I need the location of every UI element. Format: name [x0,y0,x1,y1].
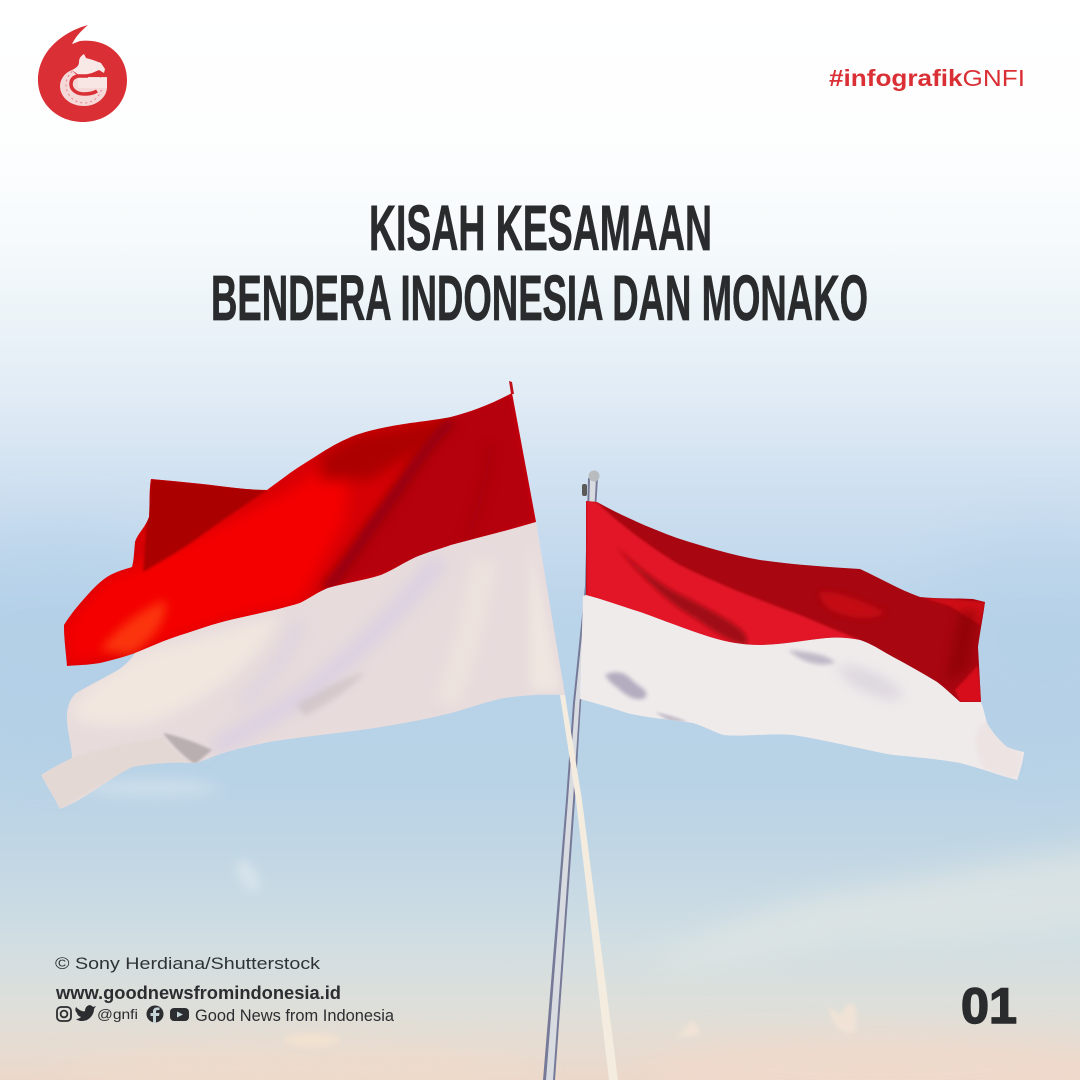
left flag white stripe [41,522,565,809]
website url: www.goodnewsfromindonesia.id [55,983,341,1003]
logo emblem bar [78,78,107,88]
logo red six shape [38,25,127,122]
left flag red stripe [64,393,536,666]
channel name: Good News from Indonesia [195,1006,395,1025]
logo: GNFI red six with eagle emblem [38,25,127,122]
right flag [580,501,1024,780]
icon: facebook [146,1006,164,1023]
left flag tip [509,381,514,394]
right flag white stripe [580,595,1024,780]
social row [57,1005,395,1025]
flag poles [543,470,618,1080]
hashtag heading: #infografik GNFI [829,65,1025,91]
icon: instagram [57,1007,71,1021]
right metal pole [543,478,598,1080]
logo eagle head [72,54,105,76]
logo emblem texture [66,67,102,103]
icon: youtube [170,1008,189,1021]
pole top finial [582,470,600,496]
small cloud right [828,1004,856,1033]
icon: twitter [75,1005,96,1021]
small cloud centre [675,1020,699,1037]
right flag red stripe [586,501,985,702]
left flag [30,380,580,820]
title line 1: KISAH KESAMAAN [369,192,712,264]
logo emblem disc [60,70,107,106]
left white pole [560,695,618,1080]
handle text: @gnfi [97,1006,138,1022]
title [211,192,868,334]
logo G inner stroke [71,76,97,94]
page number: 01 [961,978,1017,1034]
metal pole highlight [546,478,596,1080]
photo credit: © Sony Herdiana/Shutterstock [55,954,321,973]
